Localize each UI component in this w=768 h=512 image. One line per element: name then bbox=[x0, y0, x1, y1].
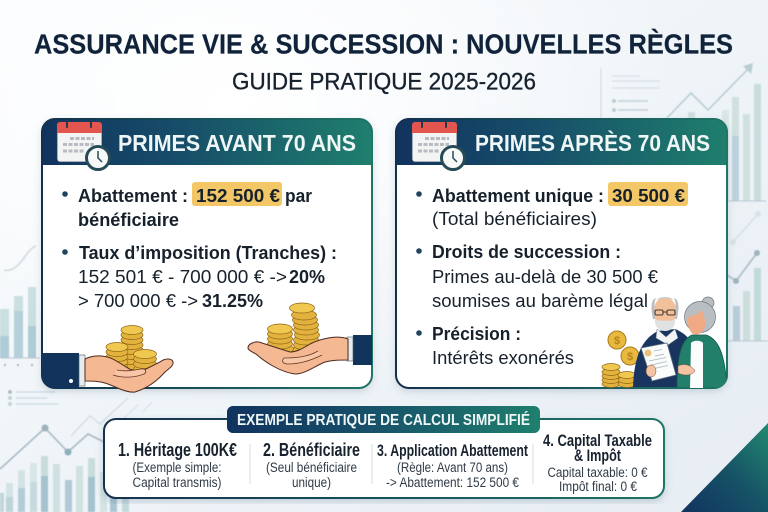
illustration: left hand with coins bbox=[42, 326, 173, 392]
illustration: coins: $ bbox=[614, 335, 620, 347]
bullet: abattement unique: (Total bénéficiaires) bbox=[432, 208, 597, 229]
bullet: abattement: par bbox=[285, 185, 312, 206]
bullet: abattement: bénéficiaire bbox=[78, 209, 179, 230]
bullet: abattement unique: Abattement unique : bbox=[432, 185, 604, 206]
bullet: précision bbox=[416, 323, 574, 368]
step 4: Capital taxable: 0 € bbox=[548, 465, 648, 480]
step 3 bbox=[377, 441, 528, 490]
bullet: abattement unique bbox=[416, 182, 688, 229]
heading badge: EXEMPLE PRATIQUE DE CALCUL SIMPLIFIÉ bbox=[237, 412, 530, 429]
step 3: (Règle: Avant 70 ans) bbox=[397, 460, 508, 475]
step 4: 4. Capital Taxable bbox=[543, 431, 652, 450]
panel header: après 70 ans: PRIMES APRÈS 70 ANS bbox=[475, 129, 710, 156]
bullet: abattement unique: 30 500 € bbox=[612, 185, 685, 206]
step 4 bbox=[543, 431, 652, 494]
panel border bbox=[396, 119, 727, 388]
bullet: précision: Intérêts exonérés bbox=[432, 347, 574, 368]
bullet: droits de succession: Primes au-delà de 30 500 € bbox=[432, 266, 659, 287]
step 1 bbox=[118, 440, 237, 490]
icon: calendar and clock bbox=[57, 119, 110, 170]
bullet: taux d'imposition: 31.25% bbox=[202, 290, 263, 311]
illustration: senior couple with document bbox=[633, 297, 727, 388]
background chart: top right bbox=[601, 63, 768, 341]
bullet: abattement: Abattement : bbox=[78, 185, 188, 206]
illustration: coins: $ bbox=[627, 351, 633, 363]
bullet: droits de succession: soumises au barème légal bbox=[432, 290, 648, 311]
panel: primes après 70 ans bbox=[396, 119, 727, 388]
illustration: coins bbox=[602, 331, 639, 388]
background chart: bottom left bbox=[0, 390, 152, 512]
panel: primes avant 70 ans bbox=[42, 119, 372, 392]
subtitle: GUIDE PRATIQUE 2025-2026 bbox=[232, 68, 536, 96]
panel header: après 70 ans bbox=[396, 119, 727, 165]
background chart: left side bbox=[0, 246, 40, 366]
bullet: taux d'imposition bbox=[62, 242, 337, 311]
icon: calendar and clock bbox=[412, 119, 464, 170]
step 2: 2. Bénéficiaire bbox=[263, 440, 360, 460]
step 3: 3. Application Abattement bbox=[377, 441, 528, 460]
illustration: right hand with coins bbox=[248, 303, 372, 374]
decorative corner triangle bbox=[681, 423, 768, 512]
bullet: droits de succession bbox=[416, 241, 659, 311]
bullet: taux d'imposition: > 700 000 € -> bbox=[78, 290, 198, 311]
bullet: taux d'imposition: 20% bbox=[289, 266, 325, 287]
step 1: (Exemple simple: bbox=[132, 460, 222, 475]
step 3: -> Abattement: 152 500 € bbox=[386, 475, 519, 490]
bullet: abattement bbox=[62, 182, 312, 230]
heading badge bbox=[227, 406, 540, 433]
bullet: précision: Précision : bbox=[432, 323, 521, 344]
panel header: avant 70 ans bbox=[42, 119, 372, 165]
bullet: taux d'imposition: Taux d’imposition (Tranches) : bbox=[79, 242, 337, 263]
panel header: avant 70 ans: PRIMES AVANT 70 ANS bbox=[118, 130, 356, 156]
panel border bbox=[42, 119, 372, 388]
step 2: (Seul bénéficiaire bbox=[266, 460, 357, 475]
step 2: unique) bbox=[292, 475, 331, 490]
step 4: & Impôt bbox=[574, 446, 621, 465]
step 1: Capital transmis) bbox=[132, 475, 222, 490]
step 4: Impôt final: 0 € bbox=[559, 479, 637, 494]
bullet: droits de succession: Droits de succession : bbox=[432, 241, 621, 262]
bullet: taux d'imposition: 152 501 € - 700 000 € -> bbox=[78, 266, 287, 287]
panel: exemple pratique bbox=[104, 406, 664, 498]
step 2 bbox=[263, 440, 360, 490]
bullet: abattement: 152 500 € bbox=[196, 185, 280, 206]
step 1: 1. Héritage 100K€ bbox=[118, 440, 237, 460]
